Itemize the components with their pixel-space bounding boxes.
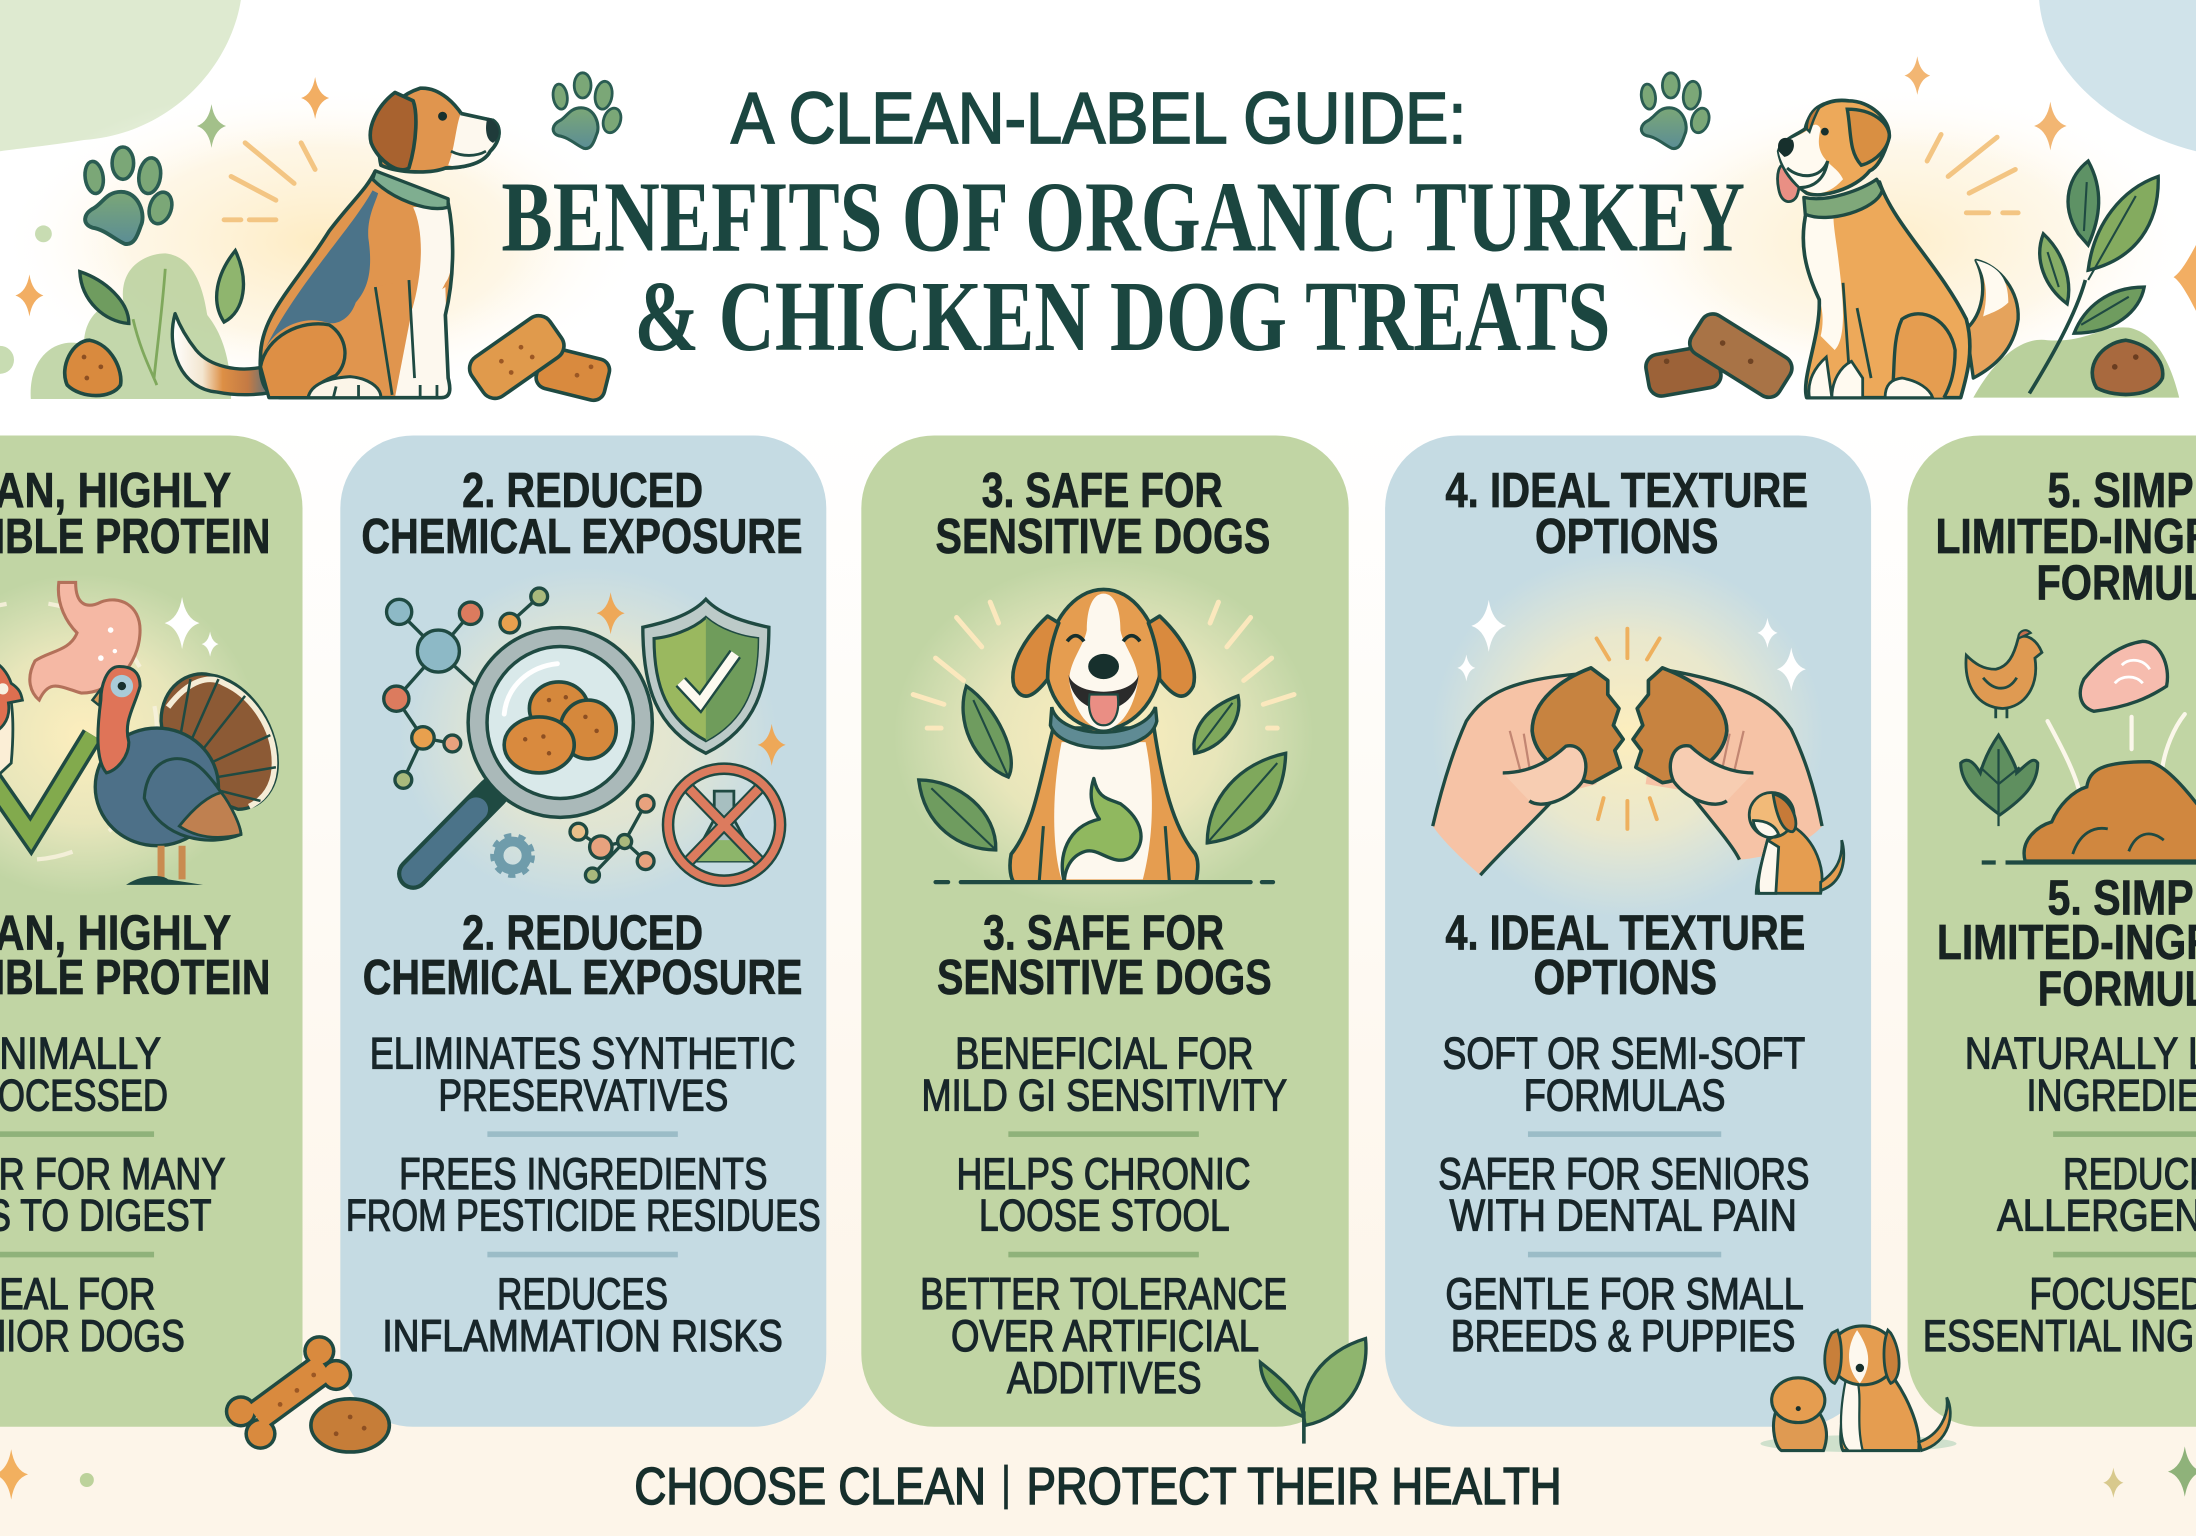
card [1907,435,2196,1427]
bullets [1923,1028,2196,1361]
panel 5 [1907,435,2196,1427]
panel 3 [861,435,1349,1427]
shield [643,599,769,753]
title line 2: BENEFITS OF ORGANIC TURKEY [501,161,1745,273]
pile of treats [2024,762,2196,861]
bullets: ADDITIVES [1007,1353,1202,1403]
heading top [1936,464,2196,610]
corner blob: green [0,0,241,151]
treats [1644,309,1797,402]
bullets: BETTER TOLERANCE [920,1269,1287,1319]
bullets: WITH DENTAL PAIN [1450,1191,1797,1241]
footer tagline: PROTECT THEIR HEALTH [1027,1457,1562,1515]
footer decorations [0,1326,2196,1500]
bullets: INFLAMMATION RISKS [382,1311,783,1361]
leaf sprig [1260,1339,1366,1444]
meat [2080,641,2167,711]
heading top: OPTIONS [1535,510,1718,564]
mound, leaves, cookie [1973,161,2179,398]
bullets: GENTLE FOR SMALL [1445,1269,1804,1319]
bullets: PRESERVATIVES [438,1070,728,1120]
sparkles and rays [0,77,329,374]
heading bottom [937,906,1272,1005]
small puppy [1749,793,1844,893]
panel 1 [0,435,303,1427]
no-chemicals sign [668,769,780,881]
header illustration: right [1640,56,2196,402]
footer tagline [634,1457,1562,1515]
paw prints [83,73,624,244]
illustration: chicken, turkey, stomach, checkmark [0,574,277,896]
title line 1: A CLEAN-LABEL GUIDE: [731,78,1466,159]
leaves [919,686,1286,850]
treats [464,310,612,404]
bottom cream band [0,1425,2196,1536]
card [861,435,1349,1427]
sparkles and rays [1904,56,2196,311]
bullets: LOOSE STOOL [979,1191,1230,1241]
bullets: BENEFICIAL FOR [955,1028,1253,1078]
heading top [361,464,802,564]
right hand [1646,669,1822,860]
heading bottom [363,906,802,1005]
heading top [1445,464,1808,564]
finger lines [1510,731,1744,773]
bullets: HELPS CHRONIC [957,1149,1251,1199]
cookie [65,340,121,396]
footer tagline: CHOOSE CLEAN [634,1457,986,1515]
card [0,435,303,1427]
bullets [1438,1028,1809,1361]
panel 4 [1385,435,1871,1427]
heading bottom: 2. REDUCED [462,906,703,960]
title line 3: & CHICKEN DOG TREATS [634,260,1611,372]
thumbs [1503,746,1586,804]
molecules [384,588,654,882]
illustration: chicken, meat, herb, pile of treats [1961,630,2196,863]
rays [913,602,1294,728]
stomach [1062,779,1141,882]
paw print [1640,73,1712,149]
bullets: FORMULAS [1524,1070,1725,1120]
heading bottom [0,906,270,1005]
heading bottom [1445,906,1805,1005]
glow behind right dog [1583,84,2196,399]
bullets: MILD GI SENSITIVITY [922,1070,1287,1120]
treat halves [1532,668,1623,783]
heading top: CHEMICAL EXPOSURE [361,510,802,564]
dog: golden [1778,100,2018,398]
illustration: happy dog with leaves [894,560,1314,910]
chicken [1966,636,2042,708]
ground line [1982,861,2196,864]
bullets: OVER ARTIFICIAL [951,1311,1259,1361]
header title [501,78,1745,372]
heading bottom: CHEMICAL EXPOSURE [363,951,802,1005]
heading bottom: 4. IDEAL TEXTURE [1445,906,1805,960]
card [340,435,826,1427]
bullets: SAFER FOR SENIORS [1438,1149,1809,1199]
left hand [1433,673,1597,875]
dog body [1010,728,1198,882]
collar [1050,707,1157,748]
illustration: hands breaking a soft treat [1431,553,1844,917]
bullets: REDUCES [497,1269,668,1319]
heading bottom [1937,871,2196,1016]
puppies [1760,1326,1957,1452]
card [1385,435,1871,1427]
herb leaf [1961,735,2038,815]
panel 2 [340,435,826,1427]
heading top [936,464,1270,564]
header illustration: left [0,73,644,404]
heading top: SENSITIVE DOGS [936,510,1270,564]
sparkles and rays [1471,600,1506,652]
bullets: FREES INGREDIENTS [399,1149,767,1199]
bullets [0,1028,225,1361]
glow [0,84,644,399]
bush and leaves [31,251,243,399]
head [1046,589,1161,729]
bullets: BREEDS & PUPPIES [1451,1311,1795,1361]
ground line [936,881,1273,884]
heading bottom: SENSITIVE DOGS [937,951,1272,1005]
bullets: FROM PESTICIDE RESIDUES [346,1191,821,1241]
heading top [0,464,270,564]
bullets [346,1028,821,1361]
sparkles [0,1446,2196,1500]
bullets [920,1028,1287,1403]
heading top: 4. IDEAL TEXTURE [1445,464,1808,518]
heading top: 3. SAFE FOR [982,464,1223,518]
dog: beagle [172,88,499,398]
illustration: magnifier, shield, molecules, no-chemicals [384,567,786,903]
corner blob: blue [2039,0,2196,151]
heading bottom: OPTIONS [1534,951,1717,1005]
white rays [2048,714,2185,801]
heading bottom: 3. SAFE FOR [983,906,1224,960]
bullets: ELIMINATES SYNTHETIC [370,1028,795,1078]
magnifier [413,793,493,874]
heading top: 2. REDUCED [462,464,703,518]
bullets: SOFT OR SEMI-SOFT [1443,1028,1805,1078]
bone treat and cookie [225,1335,389,1452]
